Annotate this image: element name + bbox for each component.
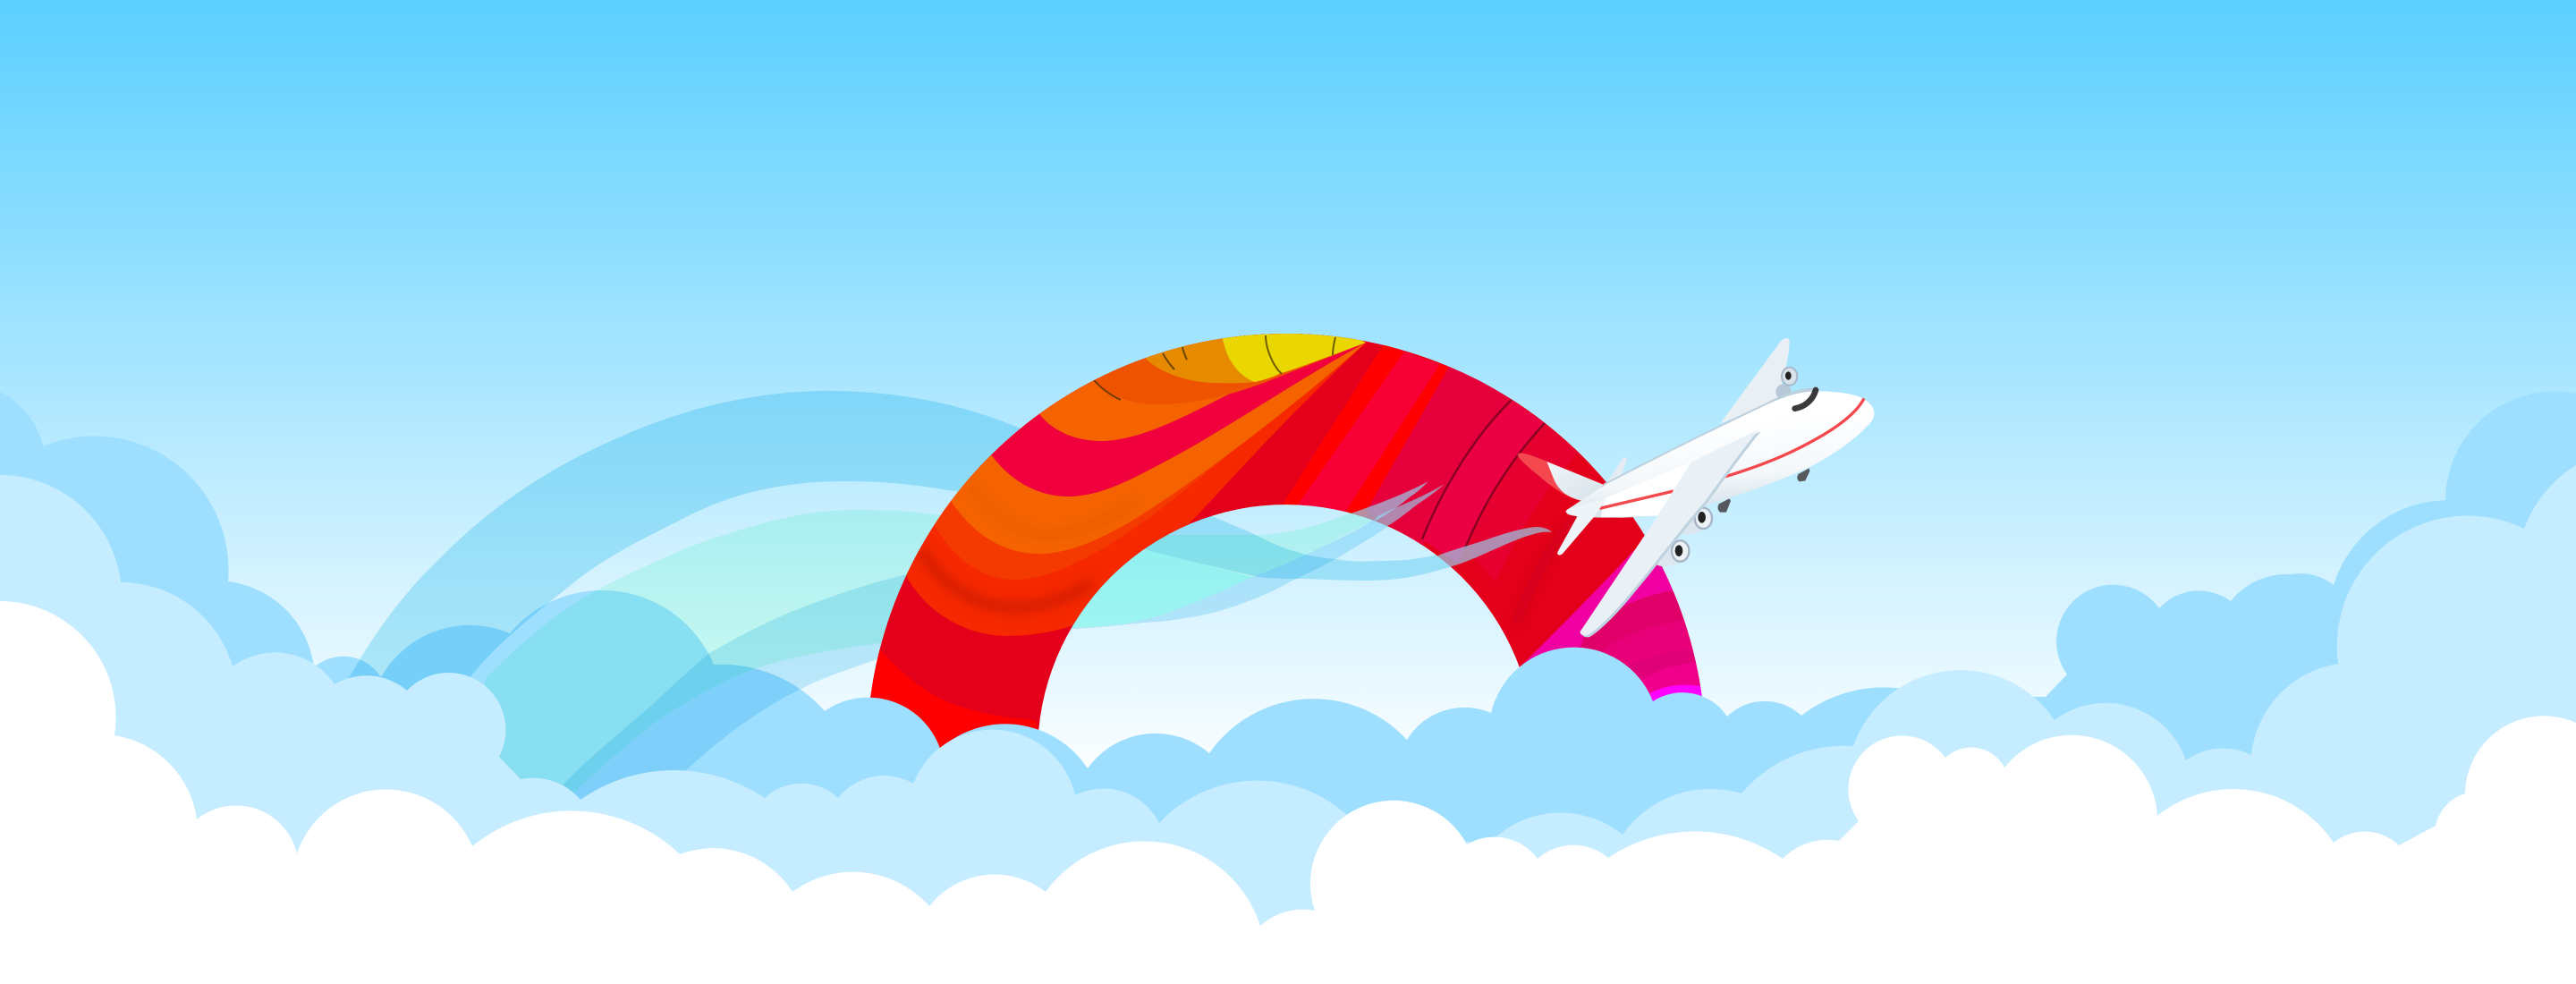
rainbow arch: [870, 334, 1702, 748]
stripe: darker red streak: [1513, 515, 1577, 624]
band: gold: [1145, 334, 1366, 383]
stripe: pink crimson: [1422, 400, 1545, 564]
band: yellow: [1223, 334, 1366, 382]
band: bright red lower left: [870, 649, 1038, 748]
band: magenta lower right: [1521, 550, 1702, 696]
stripe: crimson red: [1465, 423, 1579, 581]
plane: fuselage: [1567, 391, 1874, 518]
stripe: crimson: [1366, 362, 1512, 546]
ribbon: blue arc: [345, 391, 1552, 725]
arc band: mid: [1603, 619, 1702, 696]
stripe: red second: [1344, 364, 1452, 517]
arc band: deep: [1692, 649, 1702, 696]
plane: cockpit window: [1795, 390, 1816, 409]
arc band: dark crimson: [1580, 590, 1702, 696]
plane: engine one: [1673, 508, 1714, 539]
band: deep orange: [934, 334, 1352, 580]
plane: dorsal fin: [1606, 457, 1627, 485]
cloud layer: back left: [0, 392, 940, 984]
stripe: pink red: [1294, 352, 1440, 513]
far engine: lower: [1775, 384, 1792, 400]
stripe: dark lines: [1422, 400, 1545, 548]
band: crimson arcs lower right: [1580, 590, 1702, 696]
gear: rear: [1718, 498, 1731, 513]
plane: stabilizer: [1557, 498, 1607, 556]
engine: ring: [1672, 540, 1689, 562]
contrail tip: middle: [1374, 484, 1445, 526]
far engine: upper: [1782, 368, 1797, 386]
plane: cheat line: [1599, 398, 1864, 508]
plane: fuselage back edge: [1604, 389, 1816, 486]
contrail tip: upper: [1351, 481, 1428, 521]
gear: front: [1797, 468, 1809, 481]
cloud layer: white front: [0, 601, 2576, 984]
shadow: fold in orange: [970, 485, 1136, 535]
contrail ribbons behind the rainbow: [345, 391, 1552, 832]
far engine: intake: [1785, 371, 1792, 380]
ribbon: teal shade inside the arch opening: [1055, 550, 1252, 628]
plane: gears: [1718, 468, 1809, 513]
plane: far engines: [1775, 368, 1797, 400]
plane: aft highlight: [1601, 462, 1691, 517]
band: pink red: [991, 334, 1365, 496]
band: upper orange: [1039, 334, 1365, 442]
plane: tail fin white part: [1546, 462, 1604, 502]
plane: tail fin: [1518, 453, 1604, 502]
fold lines: yellow top: [1094, 335, 1335, 400]
band: bright magenta at foot: [1649, 685, 1702, 701]
plane: engine two: [1651, 540, 1691, 570]
contrail tip: lower: [1437, 527, 1552, 567]
arc band: bright pink: [1641, 662, 1702, 696]
shadow: fold in red orange: [921, 550, 1091, 607]
cloud layer: back right: [799, 392, 2576, 984]
band: orange: [951, 334, 1366, 554]
cloud layer: light blue middle: [0, 465, 2576, 984]
engine: ring: [1695, 508, 1712, 529]
engine: nacelle: [1673, 508, 1714, 539]
stripe: red: [1279, 344, 1404, 510]
engine: intake: [1698, 512, 1706, 523]
plane: near wing: [1580, 430, 1758, 635]
band: base crimson red: [870, 334, 1702, 730]
plane: near wing shadow: [1582, 432, 1760, 637]
right stripes fan: [1279, 344, 1583, 626]
ribbon: light blue lower: [564, 484, 1445, 832]
ribbon: teal: [465, 481, 1428, 814]
band: dark orange: [1095, 334, 1362, 404]
engine: intake: [1675, 545, 1682, 556]
engine: nacelle: [1651, 542, 1691, 570]
contrail tips over the rainbow: [1351, 481, 1552, 567]
band: red orange: [906, 334, 1364, 636]
plane: far wing: [1720, 338, 1790, 423]
icon: airplane: [1518, 338, 1874, 637]
